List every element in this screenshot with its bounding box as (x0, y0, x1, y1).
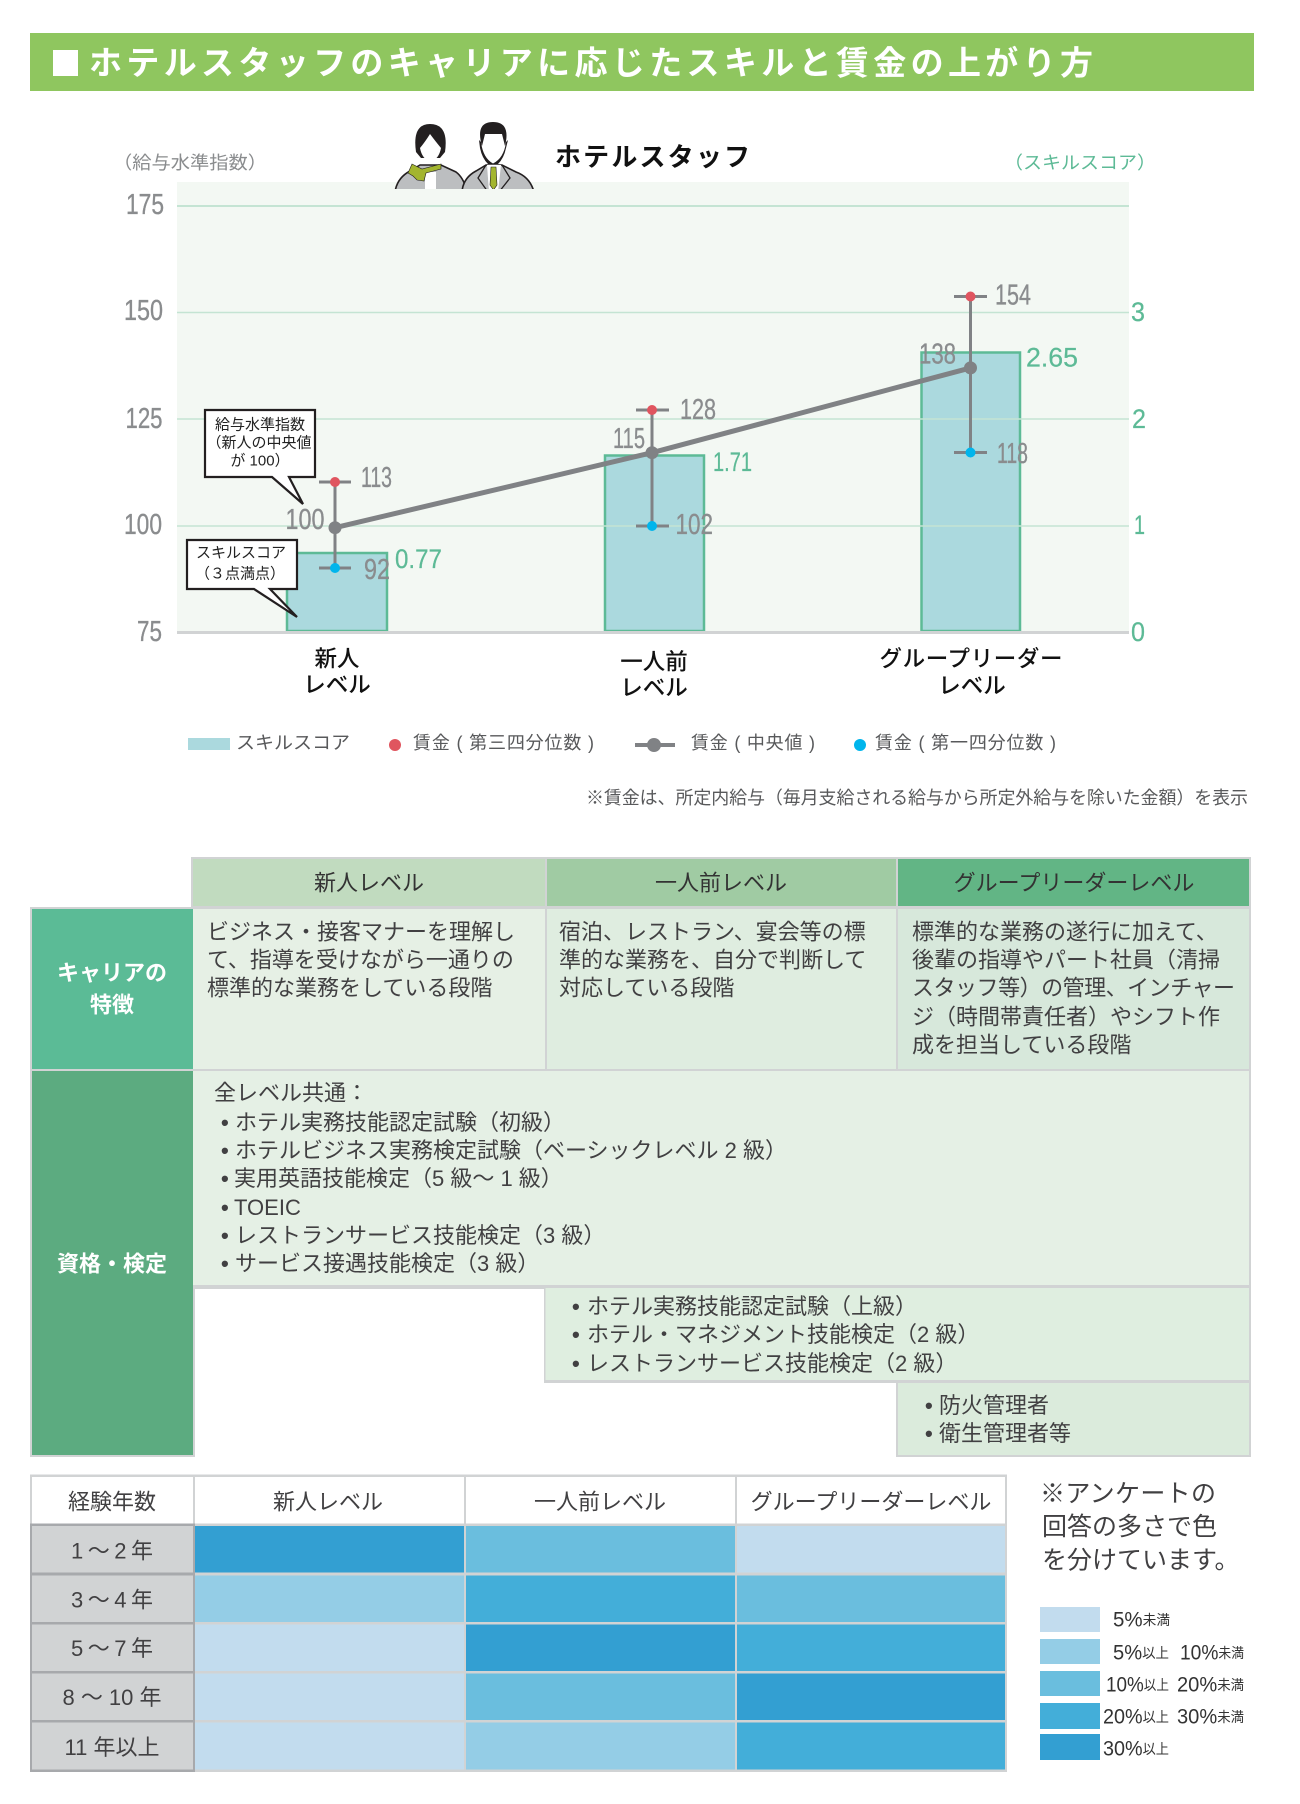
wage whiskers (319, 296, 987, 568)
right axis labels: 0 (1131, 617, 1145, 647)
heatmap legend: 10%以上 (1106, 1674, 1169, 1696)
heatmap legend: 10%未満 (1180, 1642, 1244, 1664)
cell: qualifications from independent level: ホテル実務技能認定試験（上級） (587, 1294, 917, 1318)
skill score value labels (395, 342, 1078, 574)
wage value labels: 102 (676, 509, 713, 541)
heatmap row labels (30, 1524, 195, 1772)
cell: qualifications from independent level (546, 1288, 1249, 1380)
heatmap row labels: 5 ～ 7 年 (71, 1636, 153, 1661)
heatmap row labels: 11 年以上 (65, 1735, 159, 1760)
right axis labels: 1 (1134, 510, 1145, 540)
chart legend (188, 733, 1056, 753)
cell: qualifications for all levels: サービス接遇技能検定（3 級） (235, 1250, 539, 1276)
cell: newcomer features (193, 909, 545, 1069)
heatmap legend: 5%以上 (1113, 1642, 1169, 1664)
skill score value labels: 1.71 (713, 447, 752, 477)
heatmap cells (195, 1526, 1005, 1770)
cell: qualifications for group leader: 防火管理者 (939, 1392, 1049, 1418)
heatmap header row (32, 1477, 1005, 1524)
chart legend: スキルスコア (236, 733, 350, 753)
category labels: 新人 (314, 646, 360, 672)
cell: independent features: 宿泊、レストラン、宴会等の標 (559, 920, 866, 944)
cell: independent features: 準的な業務を、自分で判断して (559, 948, 866, 972)
heatmap header row: 経験年数 (68, 1490, 156, 1514)
wage value labels: 154 (995, 280, 1031, 312)
wage value labels: 100 (286, 504, 324, 536)
callout: skill score (187, 540, 297, 617)
category labels: レベル (938, 674, 1006, 698)
left axis labels: 175 (126, 189, 164, 221)
bar: group leader skill score (922, 352, 1020, 631)
heatmap header row: 一人前レベル (534, 1490, 666, 1514)
category labels: 一人前 (620, 650, 688, 674)
cell: qualifications for all levels: レストランサービス技能検定（3 級） (235, 1222, 605, 1248)
callout: wage index: 給与水準指数 (215, 416, 305, 434)
category labels: グループリーダー (880, 646, 1062, 672)
cell: qualifications from independent level: レストランサービス技能検定（2 級） (587, 1350, 957, 1376)
bar: newcomer skill score (287, 553, 387, 631)
cell: newcomer features: 標準的な業務をしている段階 (207, 976, 492, 1000)
left axis labels: 75 (137, 616, 162, 648)
right axis labels: 3 (1131, 297, 1145, 327)
left axis labels: 150 (124, 295, 163, 327)
wage value labels: 128 (680, 394, 716, 426)
cell: group leader features (898, 909, 1249, 1069)
chart legend: 賃金 ( 第三四分位数 ) (413, 733, 594, 753)
cell: qualifications from independent level: • (572, 1350, 580, 1376)
title banner (30, 33, 1254, 91)
chart heading: hotel staff: ホテルスタッフ (555, 142, 750, 172)
cell: qualifications from independent level: • (572, 1294, 580, 1318)
skill score value labels: 2.65 (1026, 342, 1078, 372)
callout: skill score: （３点満点） (195, 566, 285, 582)
row label: career features: 特徴 (90, 992, 134, 1018)
cell: qualifications for all levels: • (221, 1222, 229, 1248)
heatmap row labels: 8 ～ 10 年 (62, 1685, 162, 1710)
cell: qualifications for all levels: • (221, 1110, 229, 1134)
row label: qualifications (32, 1071, 193, 1455)
heatmap legend (1040, 1607, 1244, 1760)
heatmap legend: 5%未満 (1113, 1608, 1170, 1632)
heatmap row labels: 3 ～ 4 年 (71, 1588, 153, 1612)
cell: qualifications for group leader: • (925, 1392, 933, 1418)
cell: qualifications for all levels: 全レベル共通： (214, 1080, 368, 1106)
title banner: ホテルスタッフのキャリアに応じたスキルと賃金の上がり方 (89, 44, 1093, 82)
wage footnote: ※賃金は、所定内給与（毎月支給される給与から所定外給与を除いた金額）を表示 (586, 788, 1248, 808)
heatmap row labels: 1 ～ 2 年 (71, 1538, 153, 1564)
chart legend: 賃金 ( 中央値 ) (691, 733, 815, 753)
experience heatmap table (30, 1474, 1007, 1772)
cell: newcomer features: ビジネス・接客マナーを理解し (207, 920, 515, 944)
right axis labels: 2 (1132, 404, 1146, 434)
table header: levels: 新人レベル (314, 870, 424, 896)
cell: qualifications for all levels: • (221, 1194, 229, 1220)
cell: independent features: 対応している段階 (559, 976, 734, 1000)
callout: wage index: が 100） (230, 452, 290, 470)
icon: hotel staff figures (395, 122, 534, 192)
wage value labels: 113 (361, 462, 392, 494)
row label: qualifications: 資格・検定 (57, 1252, 167, 1276)
left axis labels: 100 (124, 509, 162, 541)
heatmap legend: 30%以上 (1103, 1738, 1169, 1760)
plot background (177, 182, 1129, 632)
heatmap legend: 20%以上 (1103, 1706, 1169, 1728)
cell: group leader features: ジ（時間帯責任者）やシフト作 (912, 1004, 1220, 1030)
cell: qualifications for all levels: ホテルビジネス実務検定試験（ベーシックレベル 2 級） (235, 1138, 787, 1162)
left axis labels: 125 (126, 403, 162, 435)
first quartile dots (330, 448, 976, 573)
wage value labels (286, 280, 1031, 586)
bar: independent level skill score (605, 456, 704, 631)
career table (30, 857, 1251, 1457)
cell: qualifications for group leader: • (925, 1420, 933, 1446)
cell: qualifications from independent level: ホテル・マネジメント技能検定（2 級） (587, 1322, 979, 1346)
heatmap note: を分けています。 (1042, 1546, 1240, 1574)
heatmap note: ※アンケートの (1040, 1480, 1216, 1508)
wage value labels: 115 (613, 423, 645, 455)
table header: levels: グループリーダーレベル (954, 870, 1194, 896)
skill score value labels: 0.77 (395, 544, 442, 574)
chart panel: wage index and skill score (113, 153, 1156, 753)
wage median line (328, 361, 977, 534)
cell: qualifications for all levels: TOEIC (234, 1194, 301, 1220)
cell: qualifications for all levels: ホテル実務技能認定試験（初級） (235, 1110, 565, 1134)
wage value labels: 92 (364, 554, 390, 586)
table header: levels: 一人前レベル (655, 870, 787, 896)
category labels: レベル (620, 676, 688, 700)
cell: group leader features: 成を担当している段階 (912, 1032, 1131, 1058)
cell: qualifications for all levels: • (221, 1250, 229, 1276)
cell: qualifications for all levels: • (221, 1166, 229, 1190)
category labels (303, 646, 1062, 700)
wage value labels: 118 (997, 438, 1028, 470)
callout: wage index (205, 410, 315, 504)
cell: group leader features: スタッフ等）の管理、インチャー (912, 976, 1235, 1000)
heatmap note: 回答の多さで色 (1042, 1513, 1217, 1541)
heatmap legend: 20%未満 (1177, 1674, 1244, 1696)
heatmap legend: 30%未満 (1177, 1706, 1244, 1728)
heatmap note (1040, 1480, 1240, 1574)
right axis labels (1131, 297, 1146, 647)
chart legend: 賃金 ( 第一四分位数 ) (875, 733, 1056, 753)
table borders (30, 857, 1251, 1457)
left axis title: （給与水準指数） (113, 153, 267, 173)
wage value labels: 138 (919, 338, 956, 370)
heatmap header row: 新人レベル (273, 1490, 383, 1514)
right axis title: （スキルスコア） (1004, 153, 1156, 173)
cell: qualifications from independent level: • (572, 1322, 580, 1346)
row label: career features (32, 909, 193, 1069)
callout: wage index: （新人の中央値 (206, 434, 312, 452)
cell: independent features (547, 909, 896, 1069)
heatmap header row: グループリーダーレベル (751, 1490, 991, 1514)
cell: group leader features: 後輩の指導やパート社員（清掃 (912, 948, 1220, 972)
cell: qualifications for group leader: 衛生管理者等 (939, 1420, 1071, 1446)
callout: skill score: スキルスコア (196, 544, 286, 562)
cell: qualifications for all levels: • (221, 1138, 229, 1162)
cell: newcomer features: て、指導を受けながら一通りの (207, 948, 514, 972)
third quartile dots (330, 292, 976, 487)
cell: qualifications for all levels (193, 1071, 1249, 1285)
left axis labels (124, 189, 164, 648)
cell: group leader features: 標準的な業務の遂行に加えて、 (912, 920, 1218, 944)
row label: career features: キャリアの (57, 960, 167, 986)
cell: qualifications for group leader (898, 1383, 1249, 1455)
table header: levels (193, 859, 1249, 906)
category labels: レベル (303, 672, 371, 698)
cell: qualifications for all levels: 実用英語技能検定（5 級～ 1 級） (234, 1166, 563, 1190)
